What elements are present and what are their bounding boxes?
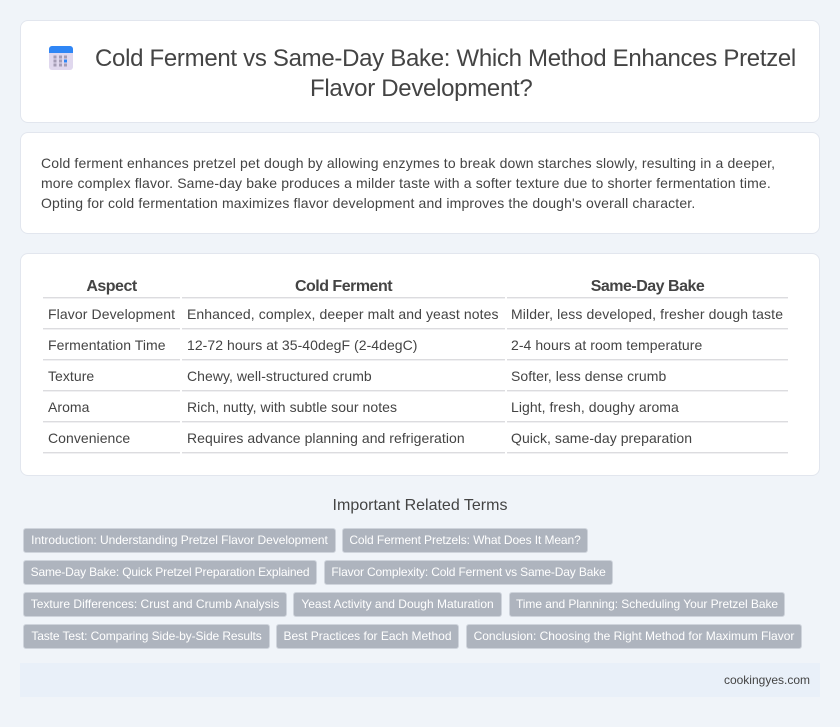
table rows: Milder, less developed, fresher dough taste — [511, 306, 783, 322]
table rows: Rich, nutty, with subtle sour notes — [187, 399, 397, 415]
panel: summary — [20, 132, 820, 234]
table rows: Fermentation Time — [48, 337, 166, 353]
table rows: Enhanced, complex, deeper malt and yeast notes — [187, 306, 499, 322]
table rows: 2-4 hours at room temperature — [511, 337, 702, 353]
text block: summary: Cold ferment enhances pretzel pet dough by allowing enzymes to break down starches slowly, resulting in a deeper, — [41, 155, 775, 171]
table rows: Quick, same-day preparation — [511, 430, 692, 446]
table rows: Softer, less dense crumb — [511, 368, 666, 384]
tag list: Yeast Activity and Dough Maturation — [301, 597, 494, 611]
title: Cold Ferment vs Same-Day Bake: Which Method Enhances Pretzel — [95, 45, 796, 72]
tag list: Time and Planning: Scheduling Your Pretzel Bake — [516, 597, 778, 611]
icon: calendar — [49, 46, 73, 70]
footer bar — [20, 663, 820, 697]
table header: cold ferment: Cold Ferment — [295, 278, 392, 295]
tag list — [23, 528, 802, 649]
table header: same-day bake: Same-Day Bake — [591, 278, 704, 295]
table rows: Flavor Development — [48, 306, 175, 322]
footer: site name: cookingyes.com — [724, 673, 810, 687]
table rows: Requires advance planning and refrigeration — [187, 430, 465, 446]
heading: related terms: Important Related Terms — [333, 497, 507, 514]
table header: aspect: Aspect — [86, 278, 137, 295]
text block: summary — [41, 155, 775, 211]
tag list: Best Practices for Each Method — [283, 629, 452, 643]
table rows: Light, fresh, doughy aroma — [511, 399, 679, 415]
text block: summary: Opting for cold fermentation maximizes flavor development and improves the dough's overall character. — [41, 195, 695, 211]
title: Flavor Development? — [310, 75, 532, 102]
table rows: Convenience — [48, 430, 130, 446]
table rows: Texture — [48, 368, 94, 384]
text block: summary: more complex flavor. Same-day bake produces a milder taste with a softer texture due to shorter fermentation time. — [41, 175, 771, 191]
tag list: Flavor Complexity: Cold Ferment vs Same-Day Bake — [331, 565, 606, 579]
table rows: 12-72 hours at 35-40degF (2-4degC) — [187, 337, 418, 353]
panel: title header — [20, 20, 820, 123]
tag list: Introduction: Understanding Pretzel Flavor Development — [31, 533, 328, 547]
table rows — [43, 297, 788, 454]
tag list: Conclusion: Choosing the Right Method for Maximum Flavor — [474, 629, 794, 643]
table rows: Chewy, well-structured crumb — [187, 368, 372, 384]
tag list: Cold Ferment Pretzels: What Does It Mean? — [349, 533, 581, 547]
table rows: Aroma — [48, 399, 89, 415]
panel: comparison table — [20, 253, 820, 476]
tag list: Taste Test: Comparing Side-by-Side Results — [31, 629, 262, 643]
tag list: Same-Day Bake: Quick Pretzel Preparation Explained — [31, 565, 309, 579]
title — [95, 45, 796, 102]
tag list: Texture Differences: Crust and Crumb Analysis — [31, 597, 279, 611]
